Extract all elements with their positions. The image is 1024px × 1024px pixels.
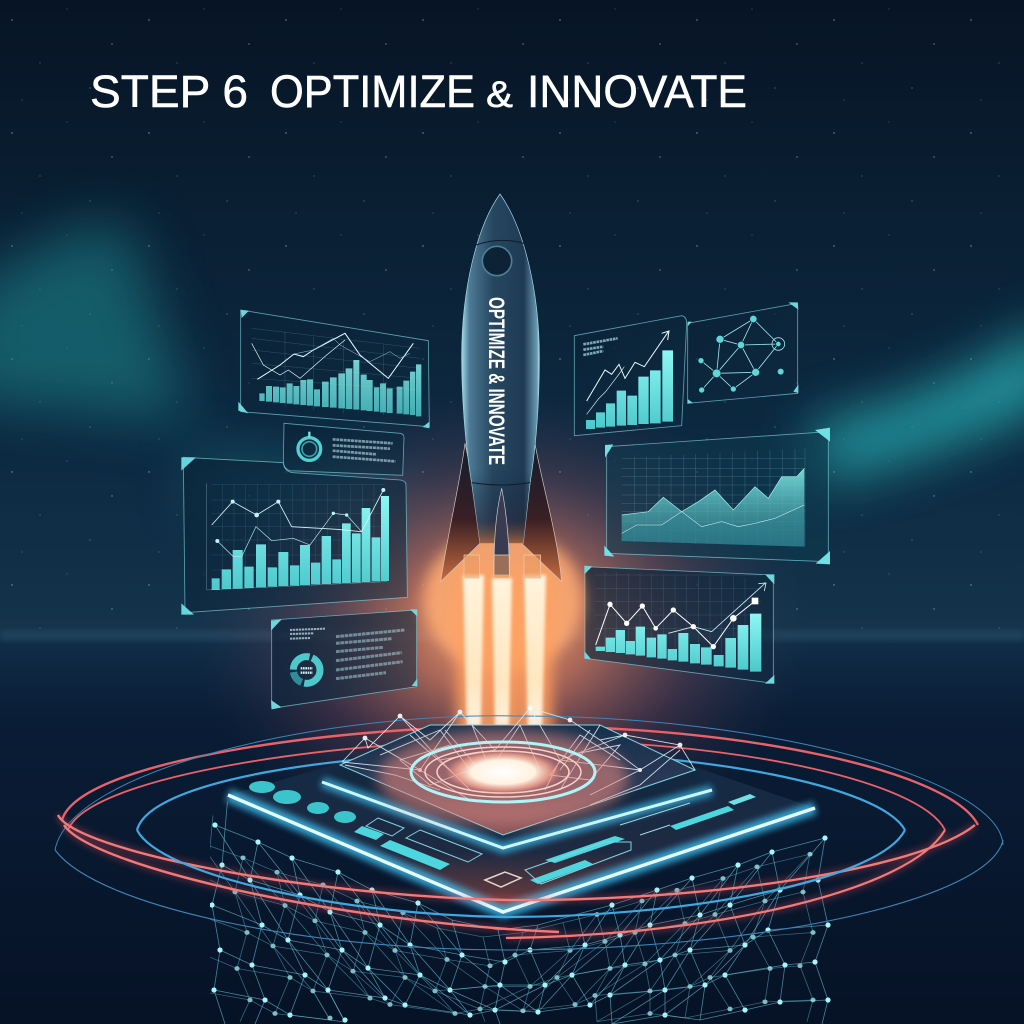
rocket fins [441,443,562,582]
rocket body [462,194,539,543]
title: & [486,74,513,115]
panel: area chart [604,428,830,564]
launch network over platform [342,706,695,805]
flames [457,572,552,773]
mesh lattice [209,795,831,1024]
title: INNOVATE [527,66,747,117]
rocket nozzles [464,555,541,578]
rocket window [482,246,512,276]
title: OPTIMIZE [270,66,475,117]
mesh cube [194,795,831,1024]
rocket [441,194,562,582]
title [90,66,747,117]
orbit rings front [55,815,1003,950]
panel: donut with text [271,609,417,709]
panel: top-left bar and line chart [238,310,429,428]
inner slab [322,768,712,848]
title: STEP 6 [90,66,248,117]
panel: network graph [688,302,798,404]
panel: large bar and line chart [181,457,407,615]
outer slab [228,762,815,912]
rocket label: OPTIMIZE & INNOVATE [484,297,509,465]
control icons [249,781,756,887]
orbit rings back [55,716,1003,850]
panel: rising bar chart with arrow [574,316,687,436]
platform [228,725,815,912]
panel: bars with line and arrow [584,566,774,684]
panels: right [574,302,830,684]
panels: left [181,310,429,709]
glow under rocket [423,530,583,670]
panel: ring gauge with text [283,423,404,475]
launch pad glow rings [378,730,628,826]
